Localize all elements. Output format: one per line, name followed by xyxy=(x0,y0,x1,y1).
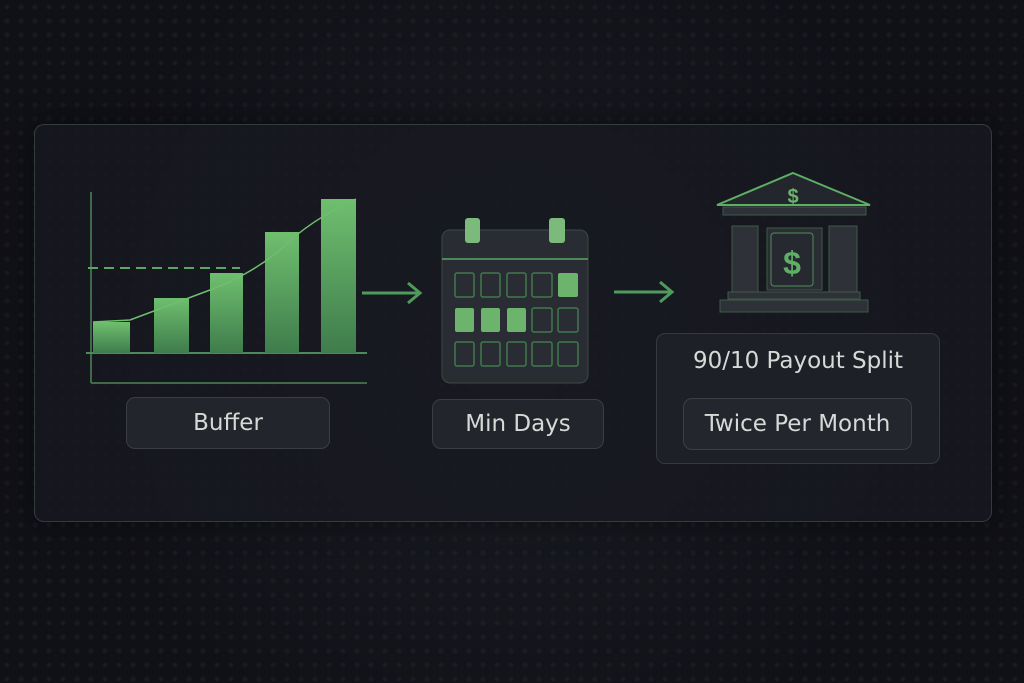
label: Min Days xyxy=(432,399,604,449)
icon: bank: $ xyxy=(787,186,799,208)
main panel xyxy=(34,124,992,522)
arrow: calendar to bank xyxy=(614,281,674,303)
label: Buffer xyxy=(126,397,330,449)
label: Min Days: Min Days xyxy=(465,411,571,437)
card: payout xyxy=(656,333,940,464)
arrow: chart to calendar xyxy=(362,282,422,304)
icon: bank: $ xyxy=(783,245,801,281)
label: Buffer: Buffer xyxy=(193,410,263,436)
heading: 90/10 Payout Split: 90/10 Payout Split xyxy=(693,348,903,374)
label: Twice Per Month: Twice Per Month xyxy=(705,411,890,437)
label: Twice Per Month xyxy=(683,398,912,450)
